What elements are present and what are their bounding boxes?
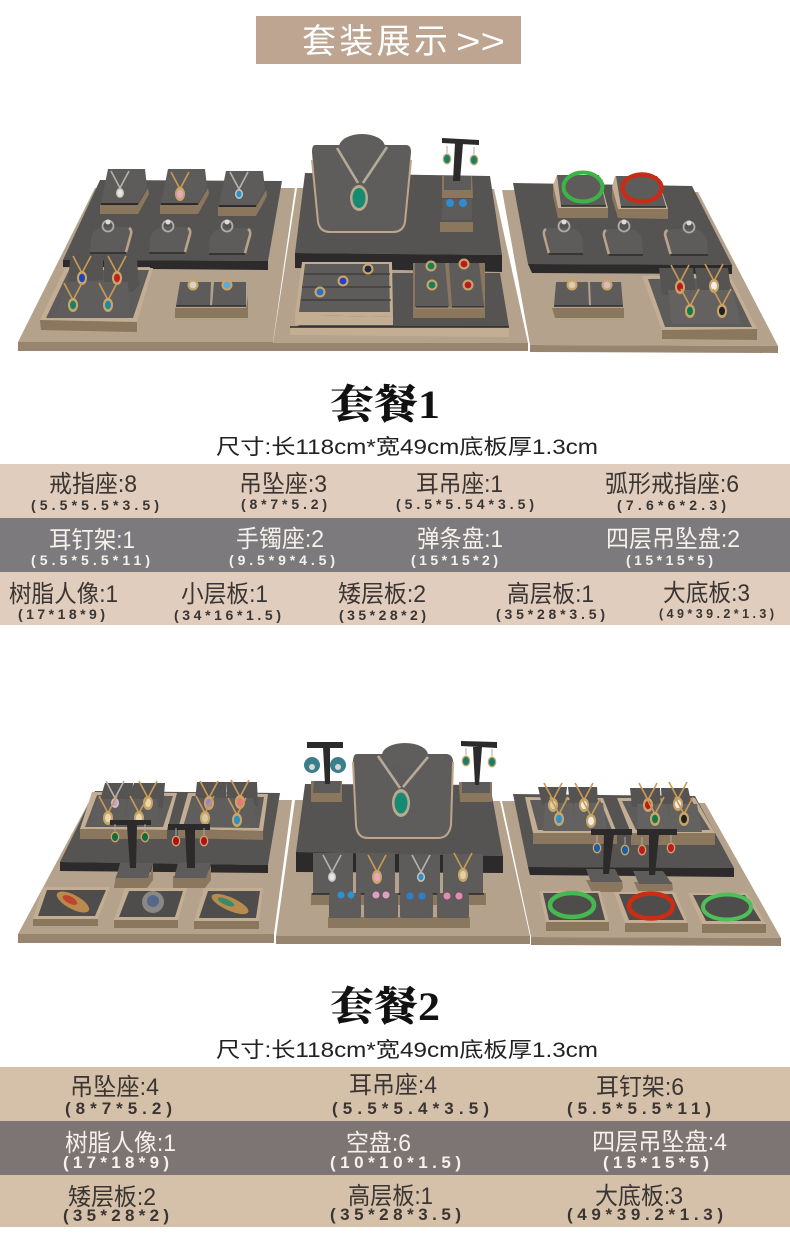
top T earring stand, left of bust	[304, 742, 346, 802]
spec table 1: (9.5*9*4.5)	[229, 552, 335, 568]
center stud seats	[328, 892, 470, 928]
spec table 1: 耳钉架:1	[49, 527, 135, 554]
spec table 2: (5.5*5.4*3.5)	[332, 1099, 489, 1118]
spec table 2: 四层吊坠盘:4	[592, 1129, 727, 1156]
spec table 1: 手镯座:2	[236, 526, 324, 553]
left T earring stands	[110, 820, 211, 888]
right pendant tray C	[525, 783, 617, 844]
left base board	[18, 188, 295, 351]
spec table 1: (8*7*5.2)	[241, 496, 327, 512]
spec table 1: (17*18*9)	[18, 606, 105, 622]
spec table 1: (35*28*3.5)	[496, 606, 605, 622]
spec table 2: 吊坠座:4	[70, 1074, 159, 1101]
spec table 1	[0, 464, 790, 625]
spec table 1: 矮层板:2	[338, 581, 426, 608]
spec table 1: (15*15*5)	[626, 552, 713, 568]
spec table 2: 矮层板:2	[68, 1184, 156, 1211]
title: package 1: 套餐1	[330, 382, 440, 427]
right slab	[513, 183, 732, 274]
size note 1: 尺寸:长118cm*宽49cm底板厚1.3cm	[216, 436, 598, 459]
stud earring seat	[440, 199, 473, 232]
right pendant tray D	[617, 782, 715, 845]
spec table 2: (35*28*3.5)	[330, 1205, 461, 1224]
center four ring seats	[413, 258, 485, 318]
spec table 1: (5.5*5.5*3.5)	[31, 497, 159, 513]
photo: package 1 display set	[18, 134, 778, 353]
spec table 2: 耳吊座:4	[349, 1072, 437, 1099]
spec table 2: (49*39.2*1.3)	[567, 1205, 723, 1224]
spec table 1: 树脂人像:1	[9, 581, 118, 608]
spec table 1: (7.6*6*2.3)	[617, 497, 726, 513]
center slab	[296, 784, 503, 873]
spec table 2: 树脂人像:1	[65, 1130, 176, 1157]
size note 2: 尺寸:长118cm*宽49cm底板厚1.3cm	[216, 1039, 598, 1062]
spec table 2: (15*15*5)	[603, 1153, 709, 1172]
spec table 1: (49*39.2*1.3)	[659, 607, 774, 621]
spec table 2: (17*18*9)	[63, 1153, 169, 1172]
center base board	[276, 800, 530, 944]
spec table 2: (5.5*5.5*11)	[567, 1099, 711, 1118]
right arc ring seats	[544, 220, 708, 255]
spec table 1: (5.5*5.5*11)	[31, 552, 150, 568]
spec table 2: (35*28*2)	[63, 1206, 169, 1225]
spec table 1: 耳吊座:1	[416, 471, 503, 498]
photo: package 2 display set	[18, 741, 781, 946]
lower center slab	[290, 273, 509, 337]
left pendant tray A	[80, 781, 177, 839]
title: package 2: 套餐2	[330, 984, 440, 1029]
spec table 2: 耳钉架:6	[596, 1074, 684, 1101]
right double ring seat	[552, 280, 624, 318]
left pendant tray B	[178, 780, 268, 840]
left pendant seats	[100, 169, 267, 216]
bust with necklace	[312, 134, 411, 232]
left arc ring seats	[90, 220, 250, 254]
spec table 1: (34*16*1.5)	[174, 607, 281, 623]
spec table 1: 弹条盘:1	[417, 526, 503, 553]
header banner	[256, 16, 521, 64]
center base board	[273, 188, 528, 351]
left double ring seat	[175, 280, 248, 318]
spec table 1: 吊坠座:3	[239, 471, 327, 498]
spec table 2: (10*10*1.5)	[330, 1153, 461, 1172]
spec table 1: 小层板:1	[181, 581, 268, 608]
header banner: >>	[456, 23, 505, 61]
right base board	[502, 190, 778, 353]
left pendant tray	[40, 256, 153, 332]
spec table 2	[0, 1067, 790, 1227]
center pendant seats	[311, 853, 486, 905]
spec table 2: 大底板:3	[595, 1183, 683, 1210]
spring tray with rings	[295, 262, 393, 325]
right base board	[502, 801, 781, 946]
header banner: 套装展示	[302, 23, 448, 61]
spec table 1: (5.5*5.54*3.5)	[396, 496, 534, 512]
bust with necklace	[353, 743, 453, 838]
T earring stand, center	[442, 138, 479, 198]
bangle trays	[539, 891, 766, 933]
right slab	[513, 794, 734, 877]
spec table 1: 大底板:3	[663, 580, 750, 607]
spec table 1: 高层板:1	[507, 581, 594, 608]
left brooch trays	[33, 887, 263, 929]
center high slab	[295, 173, 502, 272]
left base board	[18, 800, 292, 943]
spec table 1: (35*28*2)	[339, 607, 426, 623]
spec table 1: 戒指座:8	[49, 471, 137, 498]
spec table 2: 高层板:1	[348, 1183, 433, 1210]
spec table 1: 弧形戒指座:6	[605, 471, 739, 498]
top T earring stand, right of bust	[459, 741, 497, 802]
spec table 2: (8*7*5.2)	[65, 1099, 172, 1118]
spec table 1: 四层吊坠盘:2	[606, 526, 740, 553]
spec table 2: 空盘:6	[346, 1130, 411, 1157]
left slab	[60, 791, 280, 873]
right T earring stands	[586, 829, 677, 892]
left slab	[63, 180, 282, 270]
spec table 1: (15*15*2)	[411, 552, 498, 568]
right pendant tray	[642, 264, 757, 340]
bangle seats	[553, 172, 668, 219]
